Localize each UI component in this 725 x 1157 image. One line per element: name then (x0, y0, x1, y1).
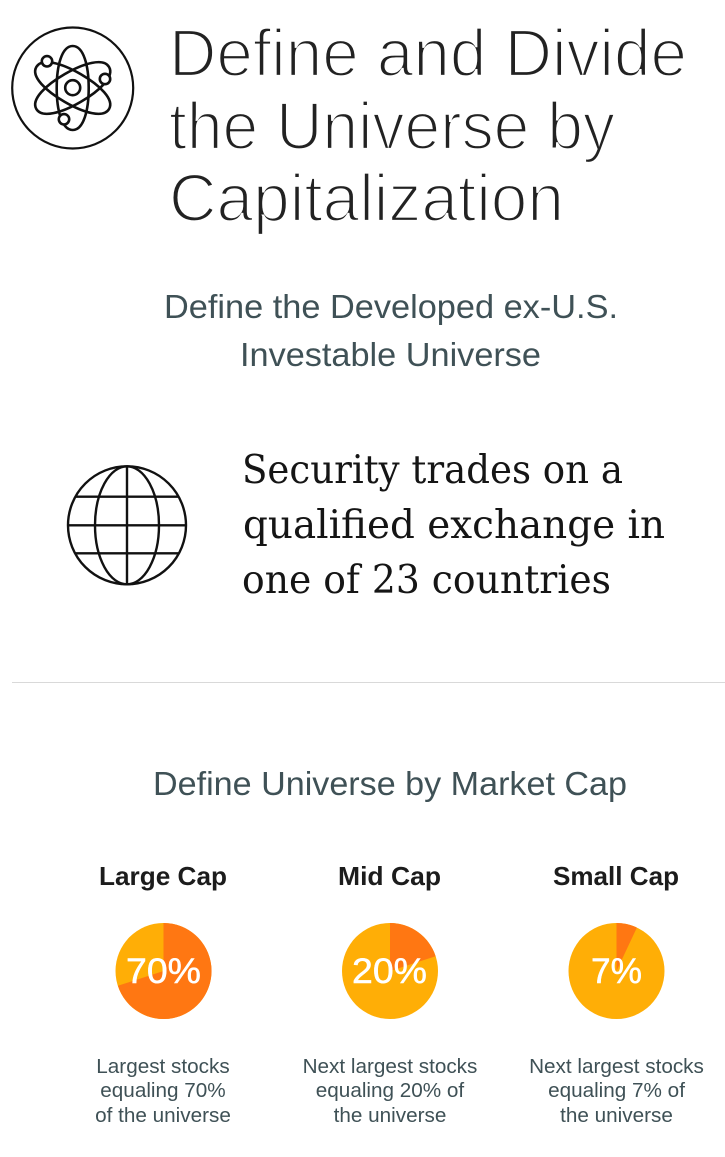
pie chart: 70% (116, 923, 212, 1019)
pie chart: 20%: 20% (352, 952, 427, 991)
label: large cap: Large Cap (99, 861, 227, 891)
text block: qualification: Security trades on a (242, 448, 623, 493)
title (169, 16, 687, 236)
title: Define and Divide (169, 16, 687, 91)
panel: large cap (95, 861, 231, 1127)
description: large cap: Largest stocks (96, 1055, 230, 1078)
description: small cap (529, 1055, 704, 1127)
label: mid cap: Mid Cap (338, 861, 441, 891)
title: the Universe by (169, 89, 615, 164)
description: large cap: of the universe (95, 1104, 231, 1127)
title: Capitalization (169, 161, 564, 236)
pie chart: 20% (342, 923, 438, 1019)
heading: market cap: Define Universe by Market Cap (153, 765, 627, 802)
panel: mid cap (303, 861, 477, 1127)
icon: globe (68, 466, 186, 584)
description: mid cap: equaling 20% of (316, 1079, 464, 1102)
panel: small cap (529, 861, 704, 1127)
description: mid cap: the universe (334, 1104, 446, 1127)
description: small cap: equaling 7% of (548, 1079, 685, 1102)
description: mid cap (303, 1055, 477, 1127)
description: small cap: Next largest stocks (529, 1055, 704, 1078)
pie chart: 7% (568, 923, 664, 1019)
pie chart: 70%: 70% (126, 952, 201, 991)
description: large cap: equaling 70% (100, 1079, 226, 1102)
text block: qualification: one of 23 countries (242, 558, 611, 603)
heading: developed universe: Investable Universe (240, 336, 541, 373)
description: large cap (95, 1055, 231, 1127)
description: small cap: the universe (560, 1104, 673, 1127)
description: mid cap: Next largest stocks (303, 1055, 477, 1078)
icon: atom (12, 28, 133, 148)
text block: qualification (242, 448, 665, 603)
text block: qualification: qualified exchange in (243, 503, 665, 548)
heading: developed universe (164, 288, 618, 373)
heading: developed universe: Define the Developed ex-U.S. (164, 288, 618, 325)
label: small cap: Small Cap (553, 861, 679, 891)
pie chart: 7%: 7% (591, 952, 642, 991)
